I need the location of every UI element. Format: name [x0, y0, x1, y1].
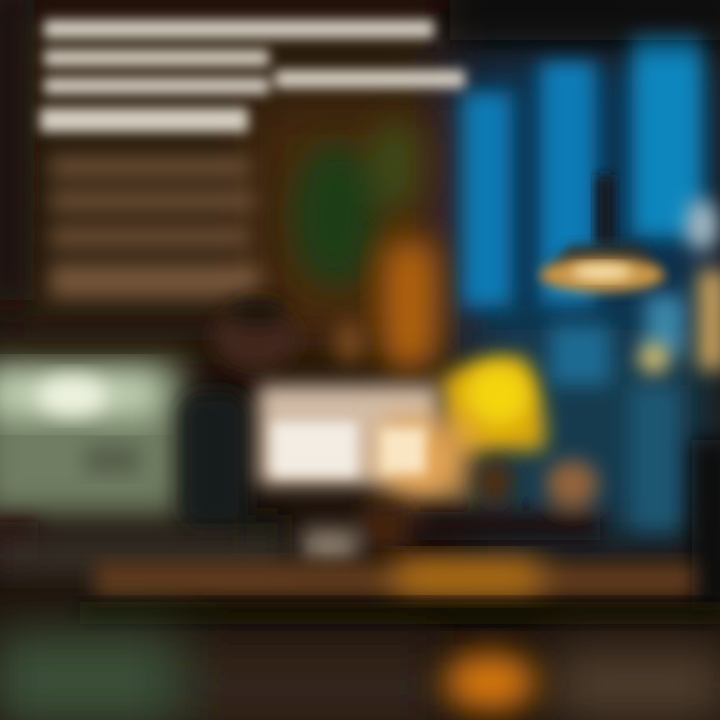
- table top: [80, 560, 720, 624]
- dark ceiling band: [0, 0, 720, 300]
- icon: plant: [293, 120, 419, 287]
- right wall lights: [639, 199, 720, 373]
- laptop screen glow: [258, 385, 470, 500]
- orange column: [382, 240, 438, 370]
- person: head: [213, 296, 366, 370]
- heading: blurred title lines: [40, 20, 465, 132]
- lower band: [0, 538, 290, 574]
- icon: hanging lamp: [538, 175, 668, 292]
- floor reflections: [0, 630, 720, 720]
- person: dark body: [180, 392, 285, 555]
- floor reflection: orange glow: [444, 652, 536, 712]
- panel: left green counter: [0, 360, 185, 515]
- table objects: [0, 440, 720, 610]
- panel: blue window columns: [462, 22, 702, 530]
- panel: upper wall tones: [0, 0, 720, 540]
- text block: blurred body lines: [50, 158, 260, 298]
- yellow table lamp: [440, 356, 545, 452]
